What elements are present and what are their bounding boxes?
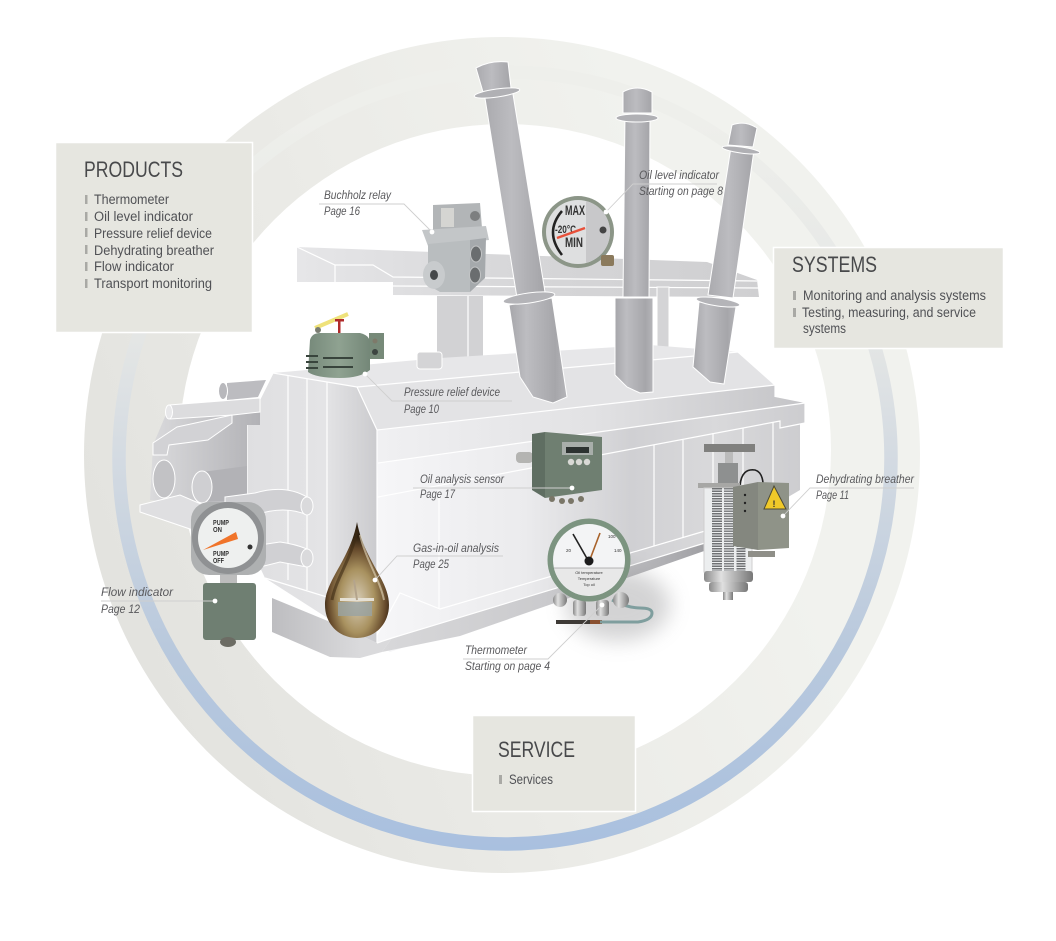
- device: thermometer: Temperature: [578, 576, 601, 581]
- inner white circle: [179, 124, 831, 776]
- callout: flow indicator: [101, 587, 217, 616]
- list: products: Transport monitoring: [94, 276, 212, 291]
- thermometer shadow: [566, 569, 670, 641]
- list: products: Dehydrating breather: [94, 243, 214, 258]
- device: dehydrating breather: !: [772, 499, 776, 509]
- callout: thermometer: Starting on page 4: [465, 661, 550, 673]
- list: products: Pressure relief device: [94, 226, 212, 241]
- callout: thermometer: Thermometer: [465, 645, 528, 657]
- callout: Buchholz relay: Page 16: [324, 206, 360, 218]
- callout: flow indicator: Flow indicator: [101, 587, 174, 599]
- panel: systems: [774, 248, 1004, 348]
- heading: service: SERVICE: [498, 737, 575, 762]
- callout: gas-in-oil analysis: Page 25: [413, 559, 449, 571]
- list: service: Services: [509, 772, 553, 787]
- panel: products: [56, 142, 252, 332]
- list: products: [85, 192, 214, 291]
- device: Buchholz relay: [422, 203, 489, 292]
- device: thermometer: 20: [566, 548, 572, 553]
- callout: oil analysis sensor: Oil analysis sensor: [420, 474, 505, 486]
- tank body: [247, 345, 805, 652]
- device: pressure relief device: [306, 314, 384, 378]
- callout: pressure relief device: Page 10: [404, 404, 439, 416]
- callout: pressure relief device: [363, 372, 512, 416]
- device: thermometer: 100: [608, 534, 616, 539]
- device: oil level indicator: [542, 196, 614, 268]
- bushing 2: [615, 88, 658, 393]
- device: thermometer: 140: [614, 548, 622, 553]
- list: products: Flow indicator: [94, 259, 174, 274]
- bushing 1: [474, 62, 567, 403]
- blue arc: [119, 72, 891, 844]
- small stub cylinder: [417, 352, 442, 369]
- bushing 3: [693, 123, 760, 384]
- callout: thermometer: [463, 603, 604, 673]
- conservator beam: [297, 247, 759, 297]
- support columns: [437, 287, 669, 366]
- callout: dehydrating breather: Dehydrating breather: [816, 474, 915, 486]
- tank base: [265, 543, 707, 658]
- device: flow indicator: PUMP: [213, 549, 229, 558]
- device: gas-in-oil drop: [325, 522, 389, 638]
- device: thermometer: [548, 518, 670, 641]
- device: oil analysis sensor: [516, 432, 602, 504]
- device: oil level indicator: MIN: [565, 235, 583, 250]
- device: oil level indicator: MAX: [565, 203, 585, 218]
- callout: oil level indicator: [604, 170, 724, 214]
- device: dehydrating breather: [698, 444, 789, 600]
- list: products: Oil level indicator: [94, 209, 193, 224]
- device: flow indicator: OFF: [213, 556, 224, 565]
- device: thermometer: Oil temperature: [575, 570, 604, 575]
- outer ring: [84, 37, 920, 873]
- heading: products: PRODUCTS: [84, 157, 183, 182]
- callout: pressure relief device: Pressure relief device: [404, 387, 500, 399]
- callout: gas-in-oil analysis: [373, 543, 503, 582]
- callout: dehydrating breather: Page 11: [816, 490, 849, 502]
- callout: oil analysis sensor: Page 17: [420, 489, 455, 501]
- callout: Buchholz relay: [319, 190, 434, 234]
- device: flow indicator: PUMP: [213, 518, 229, 527]
- cooling pipes: [140, 380, 313, 572]
- callout: oil analysis sensor: [413, 474, 574, 501]
- callout: dehydrating breather: [781, 474, 915, 518]
- callout: gas-in-oil analysis: Gas-in-oil analysis: [413, 543, 499, 555]
- list: systems: Monitoring and analysis systems: [803, 288, 986, 303]
- device: thermometer: Top oil: [583, 582, 595, 587]
- callout: flow indicator: Page 12: [101, 604, 141, 616]
- heading: systems: SYSTEMS: [792, 252, 877, 277]
- list: systems: [793, 288, 986, 336]
- device: flow indicator: [191, 502, 266, 647]
- list: products: Thermometer: [94, 192, 169, 207]
- device: flow indicator: ON: [213, 525, 222, 534]
- callout: Buchholz relay: Buchholz relay: [324, 190, 392, 202]
- callout: oil level indicator: Starting on page 8: [639, 186, 724, 198]
- list: systems: systems: [803, 321, 846, 336]
- panel: service: [472, 716, 636, 812]
- device: oil level indicator: -20°C: [555, 224, 576, 236]
- transformer illustration: [140, 62, 805, 658]
- callout: oil level indicator: Oil level indicator: [639, 170, 720, 182]
- list: systems: Testing, measuring, and service: [802, 305, 976, 320]
